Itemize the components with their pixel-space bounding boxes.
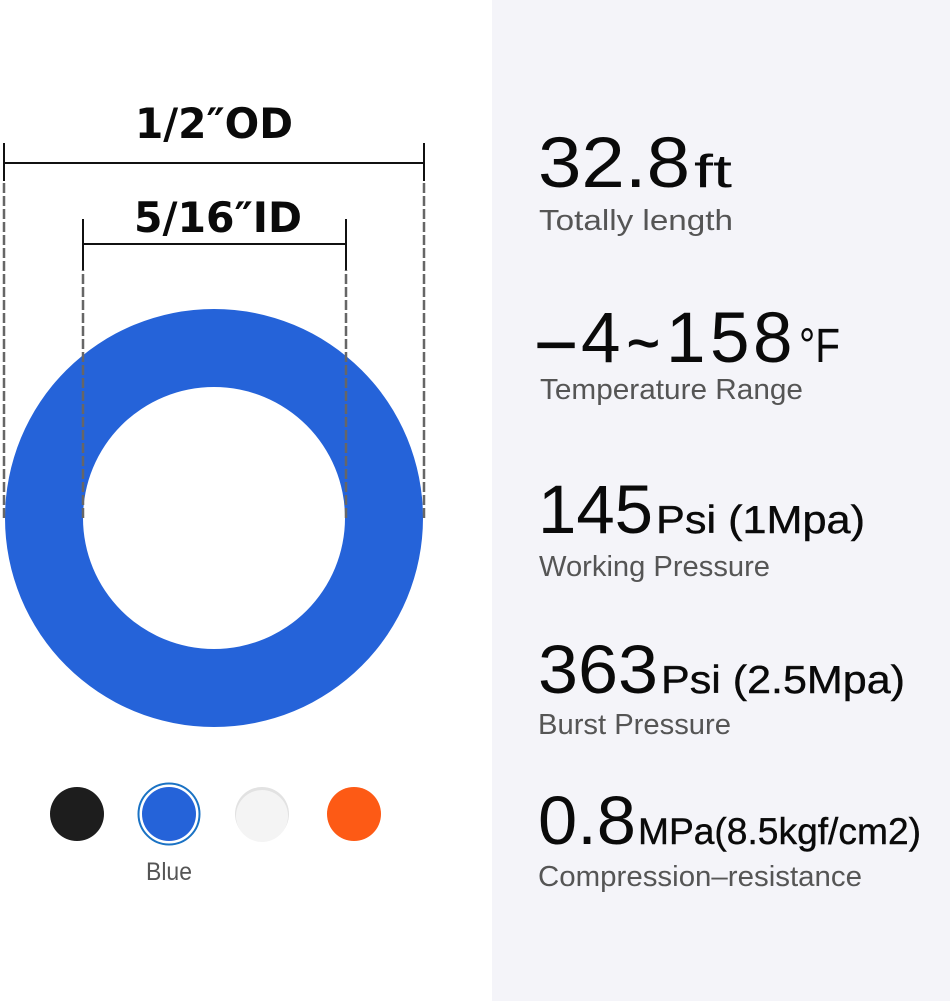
temperature caption: Temperature Range xyxy=(540,374,803,406)
spec: length xyxy=(538,124,733,237)
compression caption: Compression–resistance xyxy=(538,861,862,893)
temperature value: 4 xyxy=(581,299,620,378)
inner diameter dimension xyxy=(83,193,346,518)
swatch: white xyxy=(235,787,289,842)
spec: temperature xyxy=(538,299,840,406)
colour swatches xyxy=(50,784,381,886)
selected colour label: Blue xyxy=(146,858,192,886)
working pressure caption: Working Pressure xyxy=(539,551,770,583)
burst pressure unit: Psi (2.5Mpa) xyxy=(661,659,905,702)
temperature value: – xyxy=(538,303,575,376)
temperature value: 8 xyxy=(753,299,792,378)
outer diameter dashed guides xyxy=(4,181,424,518)
spec: burst pressure xyxy=(538,631,905,741)
burst pressure caption: Burst Pressure xyxy=(538,709,731,741)
temperature value: 1 xyxy=(666,299,706,378)
length value: 32.8 xyxy=(538,124,690,203)
compression value: 0.8 xyxy=(538,782,636,859)
burst pressure value: 363 xyxy=(538,631,658,708)
outer diameter label: 1/2″OD xyxy=(135,99,293,148)
working pressure value: 145 xyxy=(538,471,653,548)
swatch: blue selected xyxy=(138,784,200,844)
spec: compression resistance xyxy=(538,782,921,893)
inner diameter dashed guides xyxy=(83,270,346,518)
inner diameter label: 5/16″ID xyxy=(134,193,302,242)
length unit: ft xyxy=(694,145,732,197)
temperature value: 5 xyxy=(710,299,750,378)
outer diameter bracket xyxy=(4,143,424,181)
swatch: orange xyxy=(327,787,381,841)
outer diameter dimension xyxy=(4,99,424,518)
working pressure unit: Psi (1Mpa) xyxy=(656,499,865,542)
spec: working pressure xyxy=(538,471,865,583)
compression unit: MPa(8.5kgf/cm2) xyxy=(638,811,921,852)
inner diameter bracket xyxy=(83,219,346,270)
temperature unit: °F xyxy=(799,320,840,373)
swatch: black xyxy=(50,787,104,841)
panel: specifications background xyxy=(492,0,950,1001)
temperature value: ~ xyxy=(627,311,660,374)
length caption: Totally length xyxy=(539,205,733,237)
tube cross-section ring xyxy=(5,309,423,727)
